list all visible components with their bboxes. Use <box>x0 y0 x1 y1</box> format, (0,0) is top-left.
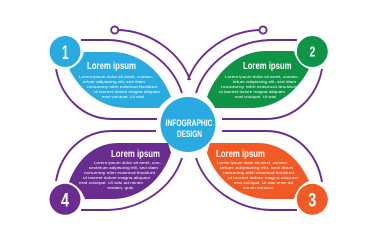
text block 2: tetuer adipiscing elit, sed diam <box>233 80 296 84</box>
heading 2: Lorem ipsum <box>243 61 292 72</box>
badge 1: 1 <box>62 42 69 64</box>
text block 3: ut laoreet dolore magna aliquam <box>228 176 298 180</box>
text block 1: ut laoreet dolore magna aliquam <box>94 90 160 94</box>
text block 3: erat volutpat. Ut wisi enim ad <box>234 181 293 185</box>
icon: right ring node <box>259 26 267 34</box>
center title: DESIGN <box>177 129 202 140</box>
text block 3: tetuer adipiscing elit, sed diam <box>220 166 293 170</box>
text block 4: ut laoreet dolore magna aliquam <box>83 176 150 180</box>
center title <box>166 118 213 140</box>
text block 2: Lorem ipsum dolor sit amet, consec- <box>225 75 300 79</box>
panel: step 1 <box>69 52 171 108</box>
panel: step 4 <box>69 143 171 199</box>
center circle <box>160 97 216 152</box>
panel: step 3 <box>207 143 309 199</box>
text block 1: Lorem ipsum dolor sit amet, consec- <box>79 75 154 79</box>
badge 4: 4 <box>61 190 69 212</box>
text block 1 <box>79 75 160 99</box>
heading 4: Lorem ipsum <box>111 149 160 160</box>
heading 1: Lorem ipsum <box>87 61 136 72</box>
badge 1 <box>50 36 80 67</box>
text block 2: ut laoreet dolore magna aliquam <box>219 90 285 94</box>
badge 3 <box>297 184 328 215</box>
text block 3 <box>217 161 298 190</box>
text block 1: tetuer adipiscing elit, sed diam <box>83 80 145 84</box>
text block 4: veniam, quis <box>107 186 133 190</box>
badge 2 <box>297 36 328 67</box>
text block 1: nonummy nibh euismod tincidunt <box>87 85 157 89</box>
badge 4 <box>50 184 80 215</box>
text block 2: nonummy nibh euismod tincidunt <box>221 85 298 89</box>
text block 3: Lorem ipsum dolor sit amet, consec- <box>217 161 289 165</box>
panel: step 2 <box>207 51 309 108</box>
connector lines <box>56 30 322 210</box>
text block 1: erat volutpat. Ut wisi <box>102 95 144 99</box>
text block 4: nonummy nibh euismod tincidunt <box>84 171 155 175</box>
text block 4: erat volutpat. Ut wisi ad minim <box>79 181 143 185</box>
badge 3: 3 <box>308 190 316 212</box>
text block 2: erat volutpat. Ut wisi <box>235 95 276 99</box>
text block 3: minim veniam, <box>243 186 274 190</box>
text block 3: nonummy nibh euismod tincidunt <box>223 171 294 175</box>
icon: left ring node <box>111 26 118 34</box>
text block 2 <box>219 75 300 99</box>
text block 4: sectetuer adipiscing elit, sed diam <box>89 166 158 170</box>
text block 4 <box>79 161 162 190</box>
text block 4: Lorem ipsum dolor sit amet, con- <box>94 161 162 165</box>
heading 3: Lorem ipsum <box>216 149 265 160</box>
center title: INFOGRAPHIC <box>166 118 213 129</box>
badge 2: 2 <box>310 44 315 61</box>
